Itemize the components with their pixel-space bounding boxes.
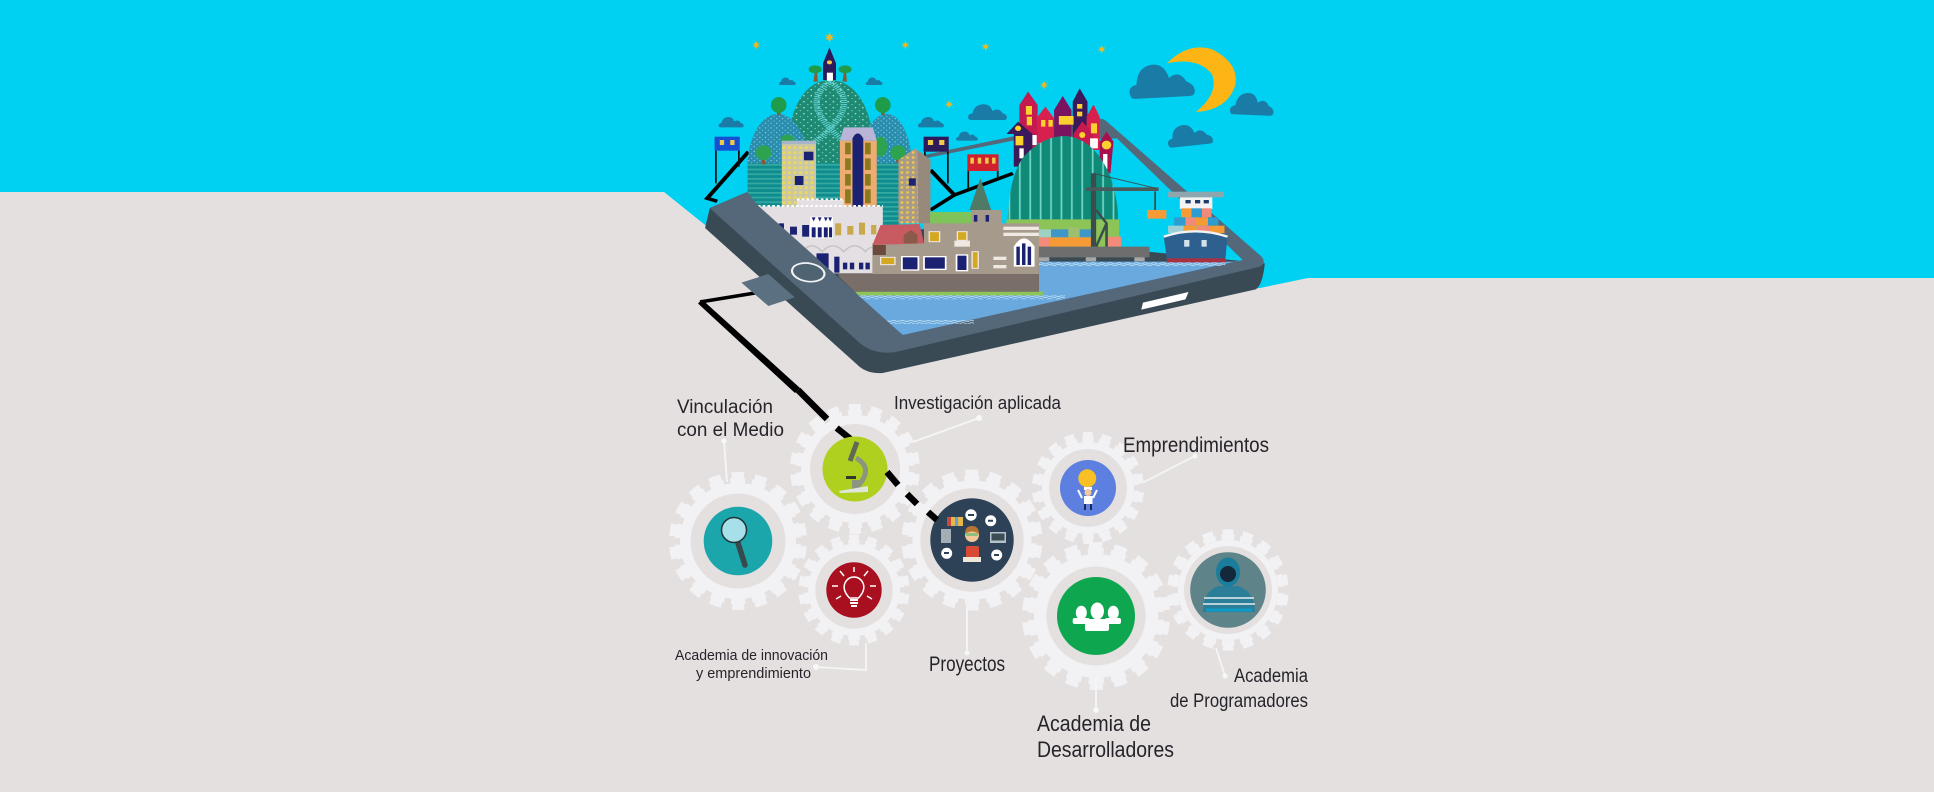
- label: Academia de Programadores: de Programadores: [1170, 691, 1308, 712]
- colourful houses: [1006, 88, 1113, 173]
- connector: Programadores: [1216, 648, 1225, 676]
- black back outline: [707, 152, 1013, 210]
- gear: Academia de Programadores: [1165, 527, 1291, 653]
- gear: Academia de innovación: [796, 532, 912, 648]
- moon: [1167, 47, 1236, 112]
- tablet face frame: [710, 119, 1264, 353]
- green lawn behind castle: [930, 212, 972, 225]
- shipping containers: [1039, 227, 1121, 247]
- flags: [715, 137, 999, 190]
- tablet left bezel: [710, 192, 903, 353]
- crane: [1086, 173, 1166, 247]
- speaker slot: [1141, 292, 1189, 310]
- icon: hooded figure: [1203, 558, 1255, 612]
- label: Academia de innovación y emprendimiento: [675, 647, 828, 682]
- label: Academia de innovación y emprendimiento: y emprendimiento: [696, 665, 811, 682]
- connector lines: [724, 418, 1225, 710]
- label: Academia de Desarrolladores: Desarrolladores: [1037, 737, 1174, 762]
- label: Academia de Programadores: [1170, 666, 1308, 712]
- connector: Desarrolladores: [1095, 677, 1097, 710]
- label: Investigación aplicada: Investigación aplicada: [894, 393, 1062, 413]
- sky background: [0, 0, 1934, 335]
- hilltop church: [823, 47, 836, 81]
- label: Vinculación con el Medio: Vinculación: [677, 397, 773, 418]
- icon: magnifying glass: [722, 518, 746, 565]
- connector cable: [698, 293, 800, 393]
- label: Proyectos: Proyectos: [929, 653, 1005, 676]
- container ship: [1164, 192, 1228, 262]
- tan castle: [839, 178, 1039, 292]
- cable through gear: [837, 428, 852, 440]
- flag: blue: [715, 137, 740, 183]
- gear: Academia de Desarrolladores: [1019, 539, 1173, 693]
- connector: Emprendimientos: [1144, 456, 1195, 482]
- green domed hall: [1006, 136, 1119, 247]
- connector: Proyectos: [966, 610, 968, 653]
- white palace: [758, 199, 883, 273]
- icon: developer with tools: [941, 509, 1006, 562]
- clouds: [718, 62, 1275, 148]
- waves: [857, 262, 1225, 324]
- connector: Investigación: [913, 418, 979, 442]
- trees: [756, 65, 906, 164]
- label: Academia de Desarrolladores: Academia de: [1037, 711, 1151, 736]
- gear: Proyectos: [899, 467, 1045, 613]
- port dock: [1038, 247, 1149, 261]
- cable segments over gears: [798, 390, 937, 520]
- gear: Emprendimientos: [1030, 430, 1146, 546]
- home button: [789, 260, 827, 284]
- usb connector: [741, 274, 795, 306]
- connector dots: [721, 415, 1228, 713]
- icon: group of people: [1073, 602, 1121, 631]
- label: Emprendimientos: Emprendimientos: [1123, 434, 1269, 457]
- tablet side: [705, 208, 1265, 373]
- flag: red: [967, 154, 999, 190]
- label: Academia de innovación y emprendimiento: Academia de innovación: [675, 647, 828, 664]
- connector: Innovación: [816, 643, 866, 670]
- gear: Vinculación con el Medio: [666, 469, 810, 613]
- label: Academia de Desarrolladores: [1037, 711, 1174, 762]
- label: Vinculación con el Medio: con el Medio: [677, 420, 784, 441]
- water on screen: [852, 260, 1243, 335]
- high-rise buildings: [782, 127, 931, 223]
- waterfront green strip: [855, 292, 1043, 295]
- illustration: tablet with smart city: [705, 32, 1275, 373]
- connector: Vinculación: [724, 441, 727, 482]
- flag: purple: [924, 137, 949, 183]
- stars: [752, 32, 1106, 109]
- hills: [748, 80, 912, 228]
- gear: Investigación aplicada: [788, 402, 922, 536]
- label: Academia de Programadores: Academia: [1234, 666, 1308, 687]
- label: Vinculación con el Medio: [677, 397, 784, 441]
- icon: person with bulb: [1078, 469, 1097, 510]
- icon: microscope: [839, 442, 868, 493]
- icon: light bulb: [832, 567, 876, 606]
